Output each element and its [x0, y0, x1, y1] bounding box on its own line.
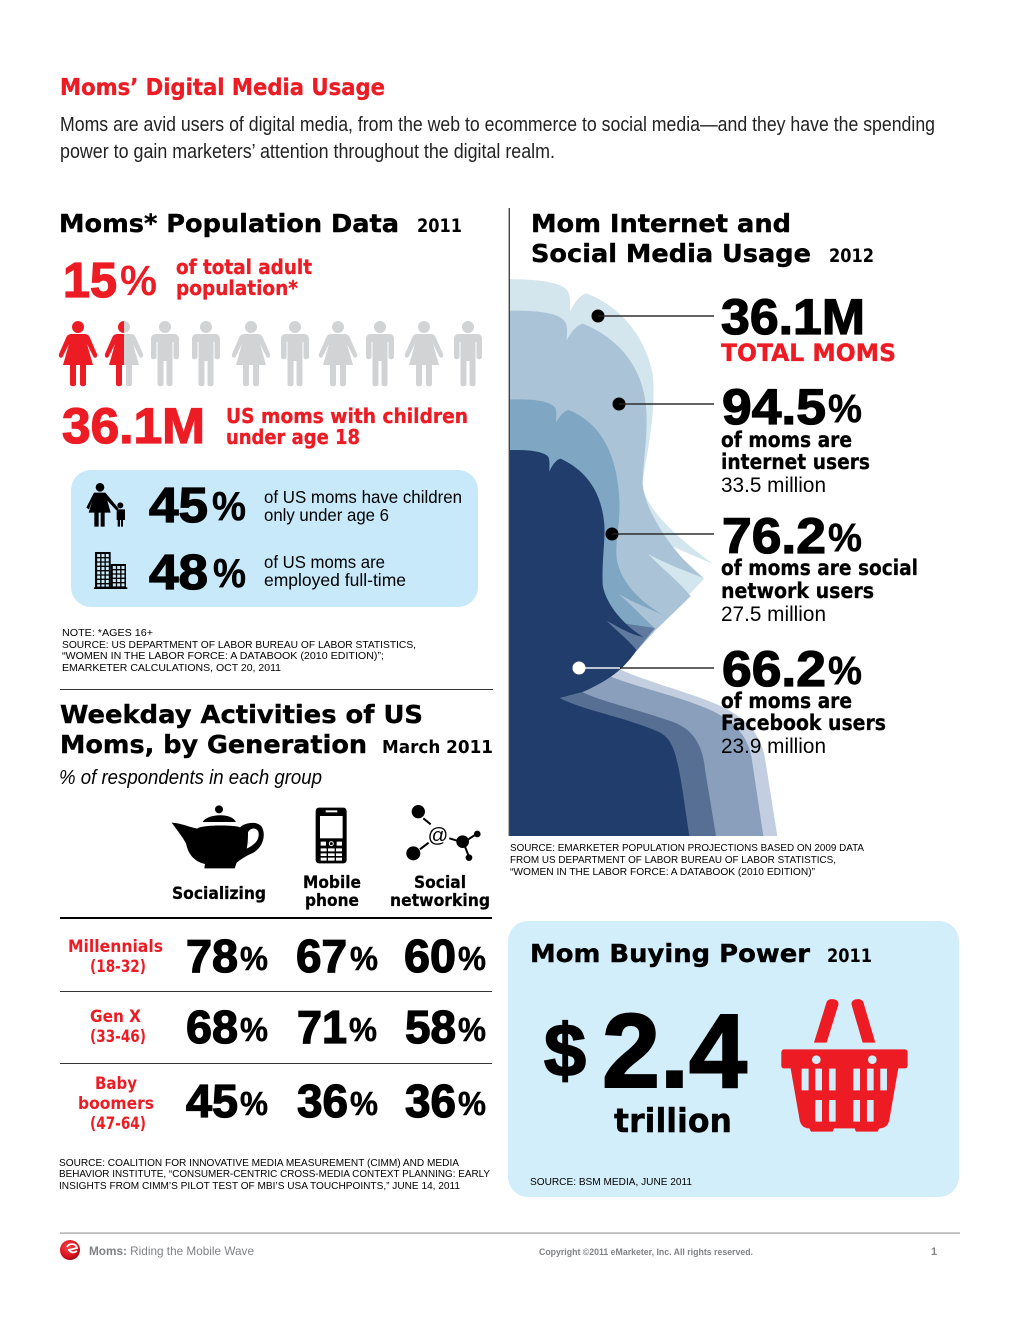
stat: 2.4 trillion dollars: 2.4	[602, 993, 747, 1110]
intro text: Moms are avid users of digital media, from the web to ecommerce to social media—and they have the spending	[60, 114, 935, 136]
heading: weekday activities	[60, 700, 493, 759]
heading: buying power: 2011	[827, 945, 872, 967]
heading: weekday activities: Moms, by Generation	[60, 730, 367, 759]
panel: population data	[59, 209, 482, 674]
marker: Facebook users	[572, 662, 714, 674]
row: Millennials: %	[350, 940, 378, 977]
stat: Facebook users: Facebook users	[721, 711, 886, 735]
stat: internet users: 94.5	[722, 379, 826, 435]
stat: Facebook users: 66.2	[722, 641, 826, 697]
stat: 45 percent: of US moms have children	[264, 487, 462, 507]
icon: teapot	[172, 805, 264, 868]
stat: 2.4 trillion dollars: $	[544, 1009, 586, 1092]
source note: internet usage: FROM US DEPARTMENT OF LABOR BUREAU OF LABOR STATISTICS,	[510, 854, 836, 866]
marker: internet users	[612, 398, 714, 410]
stat: 45 percent: 45	[149, 479, 208, 533]
stat: 15 percent	[63, 254, 312, 308]
row: Millennials: 60	[404, 930, 456, 982]
stat: 48 percent: employed full-time	[264, 570, 406, 590]
heading: internet usage: 2012	[829, 245, 874, 267]
row: Gen X: 58	[405, 1001, 456, 1053]
source note: internet usage: “WOMEN IN THE LABOR FORCE: A DATABOOK (2010 EDITION)”	[510, 866, 815, 878]
source note: internet usage	[510, 842, 864, 878]
stat: Facebook users	[721, 641, 886, 758]
stat: Facebook users: 23.9 million	[721, 735, 826, 758]
stat: Facebook users: of moms are	[721, 689, 852, 713]
source note: weekday activities: BEHAVIOR INSTITUTE, “CONSUMER-CENTRIC CROSS-MEDIA CONTEXT PLANNING: EARLY	[59, 1168, 490, 1180]
source note: weekday activities: SOURCE: COALITION FOR INNOVATIVE MEDIA MEASUREMENT (CIMM) AND MEDIA	[59, 1157, 459, 1169]
source note: population: SOURCE: US DEPARTMENT OF LABOR BUREAU OF LABOR STATISTICS,	[62, 639, 416, 651]
stat: 15 percent: population*	[176, 276, 298, 300]
icon: logo ball	[60, 1240, 80, 1260]
subheading: % of respondents in each group	[59, 767, 322, 789]
heading: buying power: Mom Buying Power	[530, 939, 811, 968]
stat: social network users: 76.2	[722, 508, 826, 564]
row: Millennials: 78	[186, 930, 238, 982]
stat: social network users	[721, 508, 918, 626]
row: Millennials: %	[240, 940, 268, 977]
icon: shopping basket	[781, 999, 908, 1132]
stat: 48 percent: of US moms are	[264, 552, 385, 572]
stat: total moms: 36.1M	[721, 289, 865, 345]
row: Millennials: %	[458, 940, 486, 977]
copyright: Copyright ©2011 eMarketer, Inc. All rights reserved.	[539, 1247, 753, 1257]
marker: social network users	[606, 528, 714, 540]
row: Baby boomers: Baby	[95, 1074, 137, 1093]
page number: 1	[931, 1246, 937, 1258]
footer	[60, 1232, 960, 1260]
source note: population	[62, 627, 416, 674]
row: Gen X: 71	[297, 1001, 347, 1053]
column labels: phone	[305, 891, 359, 910]
column labels	[172, 873, 490, 910]
stat: 45 percent	[149, 479, 462, 533]
row: Baby boomers: 36	[297, 1075, 348, 1127]
source note: weekday activities: INSIGHTS FROM CIMM’S PILOT TEST OF MBI’S USA TOUCHPOINTS,” JUNE 14, 2011	[59, 1180, 460, 1192]
row: Gen X: %	[349, 1011, 377, 1048]
title: Moms’ Digital Media Usage	[60, 75, 385, 101]
stat: 36.1M US moms: 36.1M	[62, 398, 205, 454]
column labels: Mobile	[303, 873, 361, 892]
row: Gen X	[90, 1001, 486, 1053]
row: Baby boomers: %	[350, 1085, 378, 1122]
panel: buying power	[508, 921, 959, 1197]
panel: weekday activities	[59, 700, 493, 1192]
stat: 48 percent: 48	[149, 546, 208, 600]
icon: office building	[94, 552, 127, 589]
stat: internet users: of moms are	[721, 428, 852, 452]
row: Baby boomers: (47-64)	[90, 1114, 146, 1133]
stat: internet users: %	[828, 387, 862, 431]
stat: 45 percent: only under age 6	[264, 505, 389, 525]
icon: mobile phone	[316, 808, 347, 863]
pictogram: 1.5 of 10 people	[59, 321, 482, 386]
panel: internet and social media usage	[509, 208, 918, 878]
stat: 2.4 trillion dollars	[544, 993, 747, 1140]
row: Gen X: 68	[186, 1001, 238, 1053]
stat: 15 percent: %	[120, 257, 157, 305]
footer title: Moms: Riding the Mobile Wave	[89, 1244, 254, 1258]
row: Baby boomers: boomers	[78, 1094, 154, 1113]
stat: 15 percent: of total adult	[176, 255, 312, 279]
stat: social network users: of moms are social	[721, 556, 918, 580]
source note: weekday activities	[59, 1157, 490, 1192]
stat: 15 percent: 15	[63, 254, 117, 308]
stat: social network users: network users	[721, 579, 874, 603]
row: Gen X: %	[458, 1011, 486, 1048]
row: Gen X: (33-46)	[90, 1027, 146, 1046]
callout: blue stats box	[71, 470, 478, 607]
stat: 2.4 trillion dollars: trillion	[614, 1101, 732, 1140]
row: Millennials: 67	[296, 930, 347, 982]
source note: population: NOTE: *AGES 16+	[62, 627, 153, 639]
icon: social network	[406, 805, 481, 861]
stat: 48 percent: %	[213, 550, 246, 596]
row: Millennials: (18-32)	[90, 957, 146, 976]
row: Gen X: %	[240, 1011, 268, 1048]
intro text	[60, 114, 935, 163]
stat: social network users: %	[828, 516, 862, 560]
stat: Facebook users: %	[828, 649, 862, 693]
stat: social network users: 27.5 million	[721, 603, 826, 626]
row: Gen X: Gen X	[90, 1007, 141, 1026]
heading: internet usage	[531, 209, 874, 268]
source note: internet usage: SOURCE: EMARKETER POPULATION PROJECTIONS BASED ON 2009 DATA	[510, 842, 864, 854]
stat: internet users: 33.5 million	[721, 474, 826, 497]
row: Baby boomers	[78, 1074, 486, 1133]
row: Baby boomers: %	[458, 1085, 486, 1122]
heading: weekday activities: Weekday Activities of US	[60, 700, 423, 729]
intro text: power to gain marketers’ attention throughout the digital realm.	[60, 141, 555, 163]
row: Millennials	[68, 930, 486, 982]
stat: internet users: internet users	[721, 450, 870, 474]
stat: 48 percent	[149, 546, 406, 600]
stat: total moms: TOTAL MOMS	[721, 339, 896, 367]
column labels: Socializing	[172, 884, 266, 903]
row: Baby boomers: 45	[186, 1075, 238, 1127]
icon: mother and child	[86, 483, 125, 527]
source note: population: EMARKETER CALCULATIONS, OCT 20, 2011	[62, 662, 281, 674]
stat: 45 percent: %	[212, 483, 246, 529]
source note: buying power: SOURCE: BSM MEDIA, JUNE 2011	[530, 1176, 692, 1188]
stat: 36.1M US moms	[62, 398, 468, 454]
marker: total moms	[592, 310, 714, 322]
stat: total moms	[721, 289, 896, 367]
heading: internet usage: Mom Internet and	[531, 209, 791, 238]
column labels: networking	[390, 891, 490, 910]
row: Baby boomers: %	[240, 1085, 268, 1122]
heading: population data: Moms* Population Data	[59, 209, 399, 238]
source note: population: “WOMEN IN THE LABOR FORCE: A DATABOOK (2010 EDITION)”;	[62, 650, 384, 662]
heading: population data: 2011	[417, 215, 462, 237]
stat: 36.1M US moms: US moms with children	[226, 404, 468, 428]
stat: internet users	[721, 379, 870, 497]
stat: 36.1M US moms: under age 18	[226, 425, 360, 449]
row: Baby boomers: 36	[405, 1075, 456, 1127]
chart: nested silhouettes of mom	[509, 279, 777, 836]
heading: internet usage: Social Media Usage	[531, 239, 811, 268]
icon: social network: @	[428, 824, 448, 847]
column labels: Social	[414, 873, 466, 892]
row: Millennials: Millennials	[68, 937, 163, 956]
heading: weekday activities: March 2011	[382, 737, 493, 758]
